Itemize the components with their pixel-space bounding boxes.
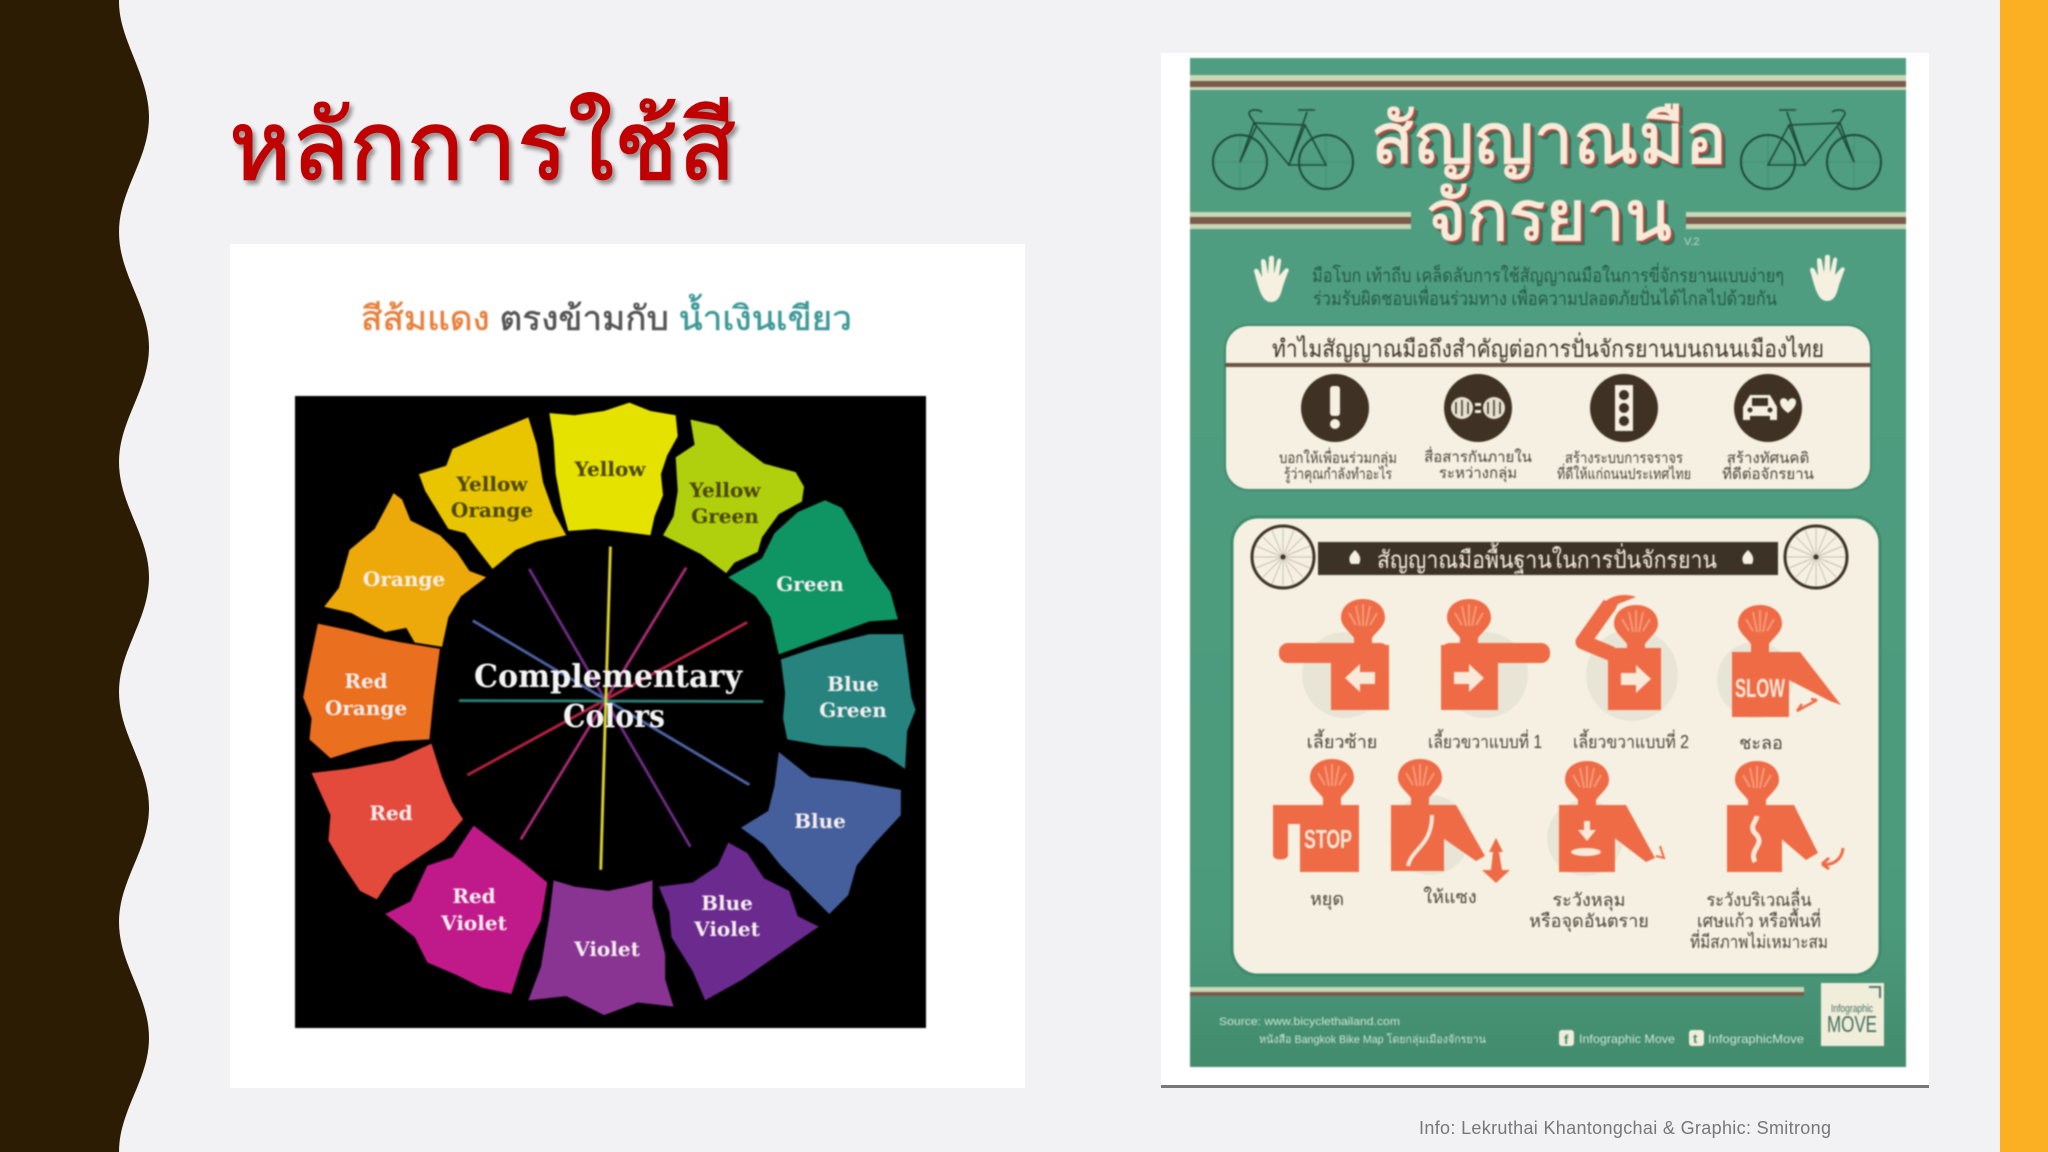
logo: infographic move: MOVE [1827, 1011, 1877, 1037]
poster title [1371, 100, 1727, 255]
signal labels: ให้แซง [1423, 886, 1477, 907]
wheel labels: Blue [827, 672, 879, 696]
panel heading: ทำไมสัญญาณมือถึงสำคัญต่อการปั่นจักรยานบนถนนเมืองไทย [1272, 332, 1824, 363]
wheel black background [295, 396, 926, 1028]
icon: right bicycle [1741, 110, 1881, 189]
wheel labels: Violet [693, 917, 761, 941]
poster white frame [1161, 53, 1929, 1086]
figure: turn left [1279, 599, 1389, 718]
wheel labels: Orange [451, 498, 533, 522]
source text: Source: www.bicyclethailand.com [1219, 1016, 1400, 1028]
poster title: สัญญาณมือ [1371, 100, 1727, 179]
panel background [230, 244, 1025, 1088]
figure: turn right 2 [1583, 595, 1678, 721]
title stripes [1190, 212, 1906, 229]
poster content [1190, 58, 1906, 1067]
wheel labels: Green [819, 698, 887, 722]
panel: colour wheel image [230, 244, 1025, 1088]
reason labels: ที่ดีให้แก่ถนนประเทศไทย [1557, 463, 1691, 483]
icon: left hand [1254, 256, 1289, 302]
panel: hand signal poster [1161, 53, 1929, 1088]
panel: why hand signals matter [1225, 325, 1871, 490]
version tag: V.2 [1684, 236, 1700, 248]
signal labels: ระวังบริเวณลื่น [1706, 887, 1812, 910]
signal labels: เลี้ยวขวาแบบที่ 1 [1428, 729, 1542, 752]
complementary axes [459, 547, 763, 870]
banner [1318, 542, 1778, 575]
signal labels: ที่มีสภาพไม่เหมาะสม [1690, 929, 1828, 952]
figure: slow: SLOW [1735, 673, 1785, 703]
banner: สัญญาณมือพื้นฐานในการปั่นจักรยาน [1377, 542, 1717, 574]
intro text [1312, 262, 1784, 310]
logo: infographic move: Infographic [1831, 1003, 1873, 1015]
reason labels: สร้างทัศนคติ [1727, 450, 1809, 467]
heading rule [1225, 363, 1871, 367]
signal labels: ระวังหลุม [1552, 890, 1626, 911]
figure: overtake [1390, 759, 1510, 883]
signal labels: หยุด [1310, 889, 1344, 910]
right accent bar [2000, 0, 2048, 1152]
poster green background [1190, 58, 1906, 1067]
reason labels: ที่ดีต่อจักรยาน [1722, 463, 1814, 483]
signal labels: เลี้ยวขวาแบบที่ 2 [1573, 729, 1689, 752]
wheel labels: Orange [325, 696, 407, 720]
icon: two helmets [1444, 374, 1512, 442]
source text: หนังสือ Bangkok Bike Map โดยกลุ่มเมืองจักรยาน [1259, 1032, 1486, 1046]
wheel labels: Colors [563, 697, 665, 735]
figure: slow [1717, 605, 1841, 718]
footer stripes [1190, 987, 1804, 996]
reason labels [1279, 446, 1814, 484]
wheel labels: Orange [363, 567, 445, 591]
wheel labels: Yellow [688, 478, 761, 502]
wheel labels: Yellow [573, 457, 646, 481]
credit line: Info: Lekruthai Khantongchai & Graphic: Smitrong [1419, 1118, 1831, 1138]
figure: turn right 1 [1441, 599, 1550, 718]
signal labels [1307, 729, 1828, 952]
icon: traffic light [1590, 374, 1658, 442]
icon: right hand [1810, 255, 1845, 301]
wheel labels: Red [344, 669, 388, 693]
wheel labels: Violet [573, 937, 641, 961]
wheel labels: Red [369, 801, 413, 825]
social links: f [1564, 1032, 1569, 1047]
intro text: มือโบก เท้าถีบ เคล็ดลับการใช้สัญญาณมือในการขี่จักรยานแบบง่ายๆ [1312, 262, 1784, 287]
figure: pothole warning [1547, 761, 1664, 876]
signal labels: เศษแก้ว หรือพื้นที่ [1697, 908, 1821, 931]
wheel labels: Complementary [474, 657, 743, 695]
social links: t [1693, 1031, 1698, 1046]
title: หลักการใช้สี [229, 93, 736, 200]
social links [1559, 1030, 1804, 1047]
figure: slippery surface warning [1727, 761, 1843, 872]
reason labels: สื่อสารกันภายใน [1424, 446, 1532, 466]
wheel segments [303, 403, 916, 1015]
signal labels: หรือจุดอันตราย [1529, 911, 1649, 932]
wheel labels: Green [691, 504, 759, 528]
frame bottom rule [1161, 1085, 1929, 1088]
icon: left wheel [1252, 526, 1314, 588]
panel card [1225, 325, 1871, 490]
wavy dark side band [0, 0, 149, 1152]
intro text: ร่วมรับผิดชอบเพื่อนร่วมทาง เพื่อความปลอดภัยปั่นได้ไกลไปด้วยกัน [1313, 285, 1777, 310]
wheel labels: Blue [794, 809, 846, 833]
reason labels: รู้ว่าคุณกำลังทำอะไร [1284, 465, 1392, 484]
figure: stop [1273, 759, 1359, 872]
wheel labels: Blue [701, 891, 753, 915]
social links: Infographic Move [1579, 1032, 1675, 1046]
icon: left bicycle [1213, 110, 1353, 189]
panel: basic hand signals [1232, 517, 1880, 975]
panel card [1232, 517, 1880, 975]
reason labels: บอกให้เพื่อนร่วมกลุ่ม [1279, 447, 1397, 468]
wheel labels [325, 457, 887, 961]
source text [1219, 1016, 1486, 1046]
icon: exclamation [1301, 374, 1369, 442]
social links: InfographicMove [1708, 1032, 1804, 1046]
top stripes [1190, 75, 1906, 90]
icon: car and heart [1734, 374, 1802, 442]
poster title: จักรยาน [1426, 177, 1672, 255]
reason labels: ระหว่างกลุ่ม [1439, 465, 1517, 483]
figure: stop: STOP [1304, 824, 1352, 854]
wheel labels: Red [452, 884, 496, 908]
wheel labels: Green [776, 572, 844, 596]
icon: right wheel [1785, 526, 1847, 588]
wheel labels: Yellow [455, 472, 528, 496]
chart: colour wheel [295, 396, 926, 1028]
signal labels: เลี้ยวซ้าย [1307, 729, 1377, 752]
signal labels: ชะลอ [1739, 733, 1783, 753]
logo: infographic move [1821, 983, 1884, 1046]
wheel labels: Violet [440, 911, 508, 935]
caption: complementary pair: สีส้มแดง ตรงข้ามกับ น้ำเงินเขียว [361, 294, 852, 338]
reason labels: สร้างระบบการจราจร [1565, 450, 1683, 467]
